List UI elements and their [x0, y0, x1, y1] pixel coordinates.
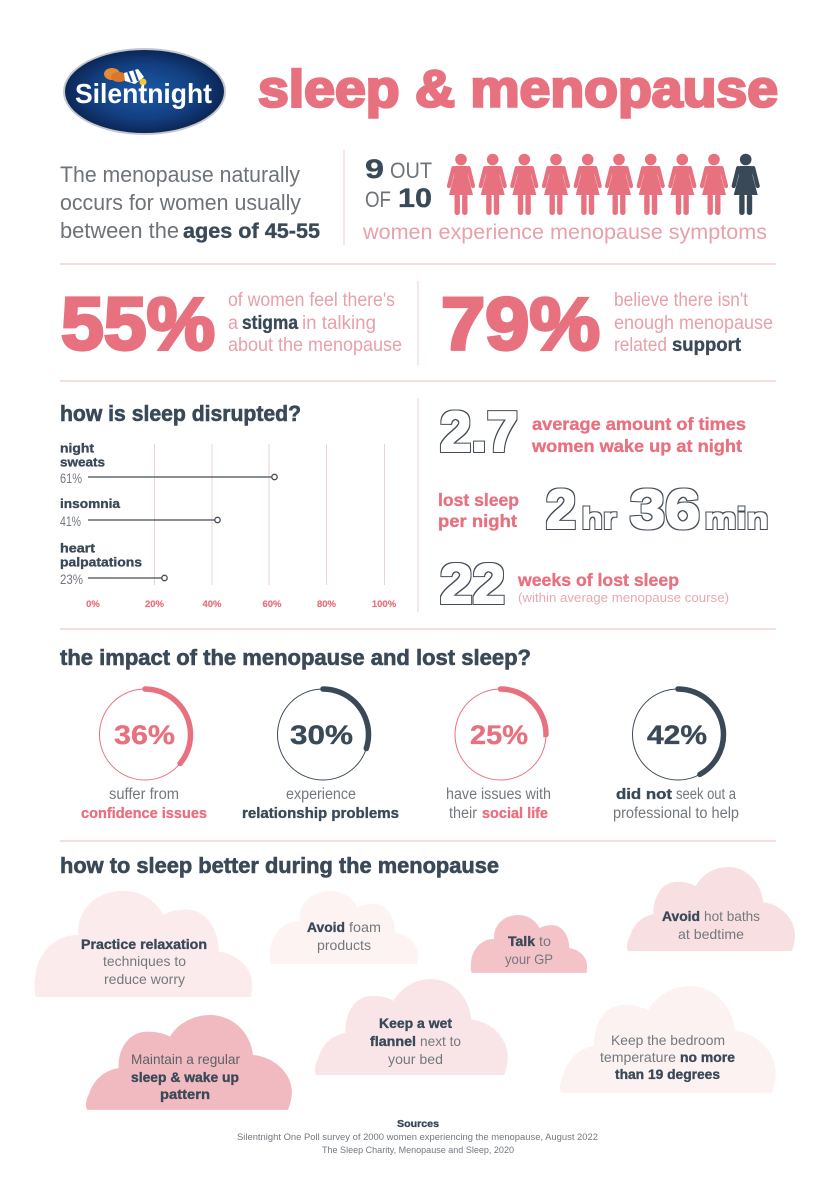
stat: 2.7 wake ups: 2.7 [440, 400, 518, 464]
bar: night sweats: sweats [60, 454, 105, 470]
stat: lost sleep per night: 2 [546, 478, 576, 540]
bar: night sweats: 61% [60, 470, 82, 486]
donut: 42% did not seek help: seek out a [676, 786, 736, 803]
donut: 42% did not seek help: did not [616, 786, 672, 803]
cloud: keep a wet flannel: flannel [370, 1034, 416, 1049]
bar: heart palpatations: 23% [60, 571, 83, 587]
chart axis labels: 80% [317, 599, 337, 610]
chart axis labels [86, 599, 397, 610]
cloud: practice relaxation: techniques to [103, 953, 186, 969]
donut: 25% social life [446, 689, 551, 822]
chart: sleep disruption lollipop [60, 440, 397, 610]
stat: 55% stigma: in talking [302, 313, 376, 334]
stat: 2.7 wake ups [440, 400, 746, 464]
chart axis labels: 100% [372, 599, 397, 610]
stat: 9 out of 10: OUT [390, 158, 432, 183]
stat: 79% support: related [614, 335, 667, 356]
stat: 79% support: support [672, 335, 742, 356]
cloud: regular sleep pattern: sleep & wake up [131, 1070, 239, 1085]
logo: Silentnight: Silentnight [75, 78, 212, 109]
donut: 42% did not seek help: 42% [647, 720, 707, 750]
cloud: avoid hot baths: hot baths [704, 908, 760, 924]
cloud: keep a wet flannel [315, 979, 508, 1075]
bar: insomnia: insomnia [60, 496, 121, 511]
text: menopause age range: The menopause naturally [60, 162, 300, 187]
text: menopause age range: between the [60, 218, 179, 243]
stat: lost sleep per night: per night [438, 511, 517, 531]
stat: lost sleep per night: 36 [630, 478, 700, 540]
stat: 55% stigma: of women feel there's [228, 290, 395, 311]
stat: 55% stigma: 55% [61, 282, 215, 366]
cloud: keep a wet flannel: Keep a wet [379, 1016, 453, 1031]
caption: women experience symptoms: women experience menopause symptoms [362, 220, 767, 244]
stat: 55% stigma: stigma [242, 313, 298, 334]
stat: 2.7 wake ups: average amount of times [532, 414, 746, 434]
donut: 25% social life: 25% [470, 720, 528, 750]
cloud: avoid hot baths: at bedtime [678, 926, 744, 942]
sources [237, 1118, 598, 1156]
stat: 55% stigma [61, 282, 402, 366]
bar: heart palpatations: heart [60, 540, 96, 556]
stat: lost sleep per night: hr [582, 502, 617, 536]
stat: 9 out of 10: 10 [398, 183, 432, 213]
cloud: bedroom temperature: no more [680, 1050, 735, 1065]
bar: insomnia: 41% [60, 513, 81, 529]
cloud: keep a wet flannel: next to [420, 1033, 461, 1049]
text: menopause age range: ages of 45-55 [183, 220, 320, 243]
donut: 25% social life: have issues with [446, 786, 551, 803]
cloud: bedroom temperature [560, 986, 776, 1093]
stat: 9 out of 10 [365, 154, 432, 213]
cloud: avoid hot baths [627, 867, 795, 951]
cloud: practice relaxation: Practice relaxation [81, 937, 207, 952]
stat: 22 weeks: (within average menopause course) [518, 590, 729, 605]
stat: 79% support: 79% [441, 282, 600, 366]
sources: Sources [397, 1118, 439, 1130]
sources: The Sleep Charity, Menopause and Sleep, 2020 [322, 1145, 514, 1156]
cloud: talk to your GP: to [539, 933, 551, 949]
cloud: talk to your GP: your GP [505, 951, 553, 967]
stat: 55% stigma: about the menopause [228, 335, 402, 356]
donut: 25% social life: their [449, 805, 477, 822]
stat: 79% support [441, 282, 773, 366]
donut: 30% relationship problems: 30% [290, 720, 353, 750]
bar: heart palpatations [60, 540, 167, 587]
stat: 22 weeks: 22 [440, 552, 505, 615]
donut: 30% relationship problems: relationship problems [242, 805, 399, 822]
donut: 30% relationship problems: experience [286, 786, 356, 803]
chart axis labels: 60% [262, 599, 282, 610]
stat: lost sleep per night: lost sleep [438, 490, 519, 510]
stat: 79% support: enough menopause [614, 313, 773, 334]
cloud: regular sleep pattern: pattern [160, 1087, 210, 1102]
cloud: avoid foam products [270, 891, 418, 964]
donut: 36% confidence issues [81, 689, 207, 822]
cloud: practice relaxation: reduce worry [104, 971, 185, 987]
cloud: avoid hot baths: Avoid [662, 909, 700, 924]
donut: 30% relationship problems [242, 689, 399, 822]
stat: 79% support: believe there isn't [614, 290, 749, 311]
sources: Silentnight One Poll survey of 2000 women experiencing the menopause, August 2022 [237, 1132, 598, 1143]
heading: how to sleep better: how to sleep better during the menopause [60, 853, 499, 878]
stat: 22 weeks: weeks of lost sleep [517, 570, 679, 590]
cloud: bedroom temperature: Keep the bedroom [611, 1032, 725, 1048]
donut: 36% confidence issues: suffer from [109, 786, 179, 803]
stat: 9 out of 10: 9 [365, 154, 384, 184]
heading: how is sleep disrupted: how is sleep disrupted? [60, 401, 301, 426]
donut: 25% social life: social life [482, 805, 548, 822]
chart axis labels: 0% [86, 599, 100, 610]
donut: 42% did not seek help [613, 689, 739, 822]
donut: 42% did not seek help: professional to help [613, 805, 739, 822]
chart axis labels: 40% [202, 599, 222, 610]
cloud: bedroom temperature: temperature [600, 1049, 676, 1065]
text: menopause age range [60, 162, 320, 243]
stat: lost sleep per night: min [704, 502, 768, 536]
cloud: talk to your GP: Talk [508, 934, 536, 949]
cloud: avoid foam products: products [317, 937, 371, 953]
stat: 22 weeks [440, 552, 729, 615]
stat: lost sleep per night [438, 478, 768, 540]
icons: row of ten women [449, 154, 758, 215]
donut: 36% confidence issues: 36% [114, 720, 175, 750]
stat: 9 out of 10: OF [365, 187, 391, 212]
cloud: regular sleep pattern: Maintain a regular [131, 1051, 240, 1067]
cloud: avoid foam products: Avoid [307, 920, 345, 935]
cloud: avoid foam products: foam [349, 919, 381, 935]
cloud: bedroom temperature: than 19 degrees [615, 1067, 720, 1082]
bar: night sweats: night [60, 440, 95, 456]
stat: 2.7 wake ups: women wake up at night [531, 436, 742, 456]
heading: impact of the menopause: the impact of the menopause and lost sleep? [60, 645, 531, 670]
donut: 36% confidence issues: confidence issues [81, 805, 207, 822]
stat: 55% stigma: a [228, 313, 238, 334]
chart axis labels: 20% [145, 599, 165, 610]
cloud: regular sleep pattern [86, 1015, 292, 1110]
cloud: talk to your GP [471, 915, 587, 973]
text: menopause age range: occurs for women usually [60, 190, 301, 215]
bar: heart palpatations: palpatations [60, 554, 142, 570]
title: sleep & menopause [258, 60, 778, 118]
bar: night sweats [60, 440, 277, 486]
cloud: keep a wet flannel: your bed [388, 1051, 443, 1067]
logo: Silentnight [63, 48, 226, 135]
cloud: practice relaxation [34, 891, 252, 997]
bar: insomnia [60, 496, 220, 529]
